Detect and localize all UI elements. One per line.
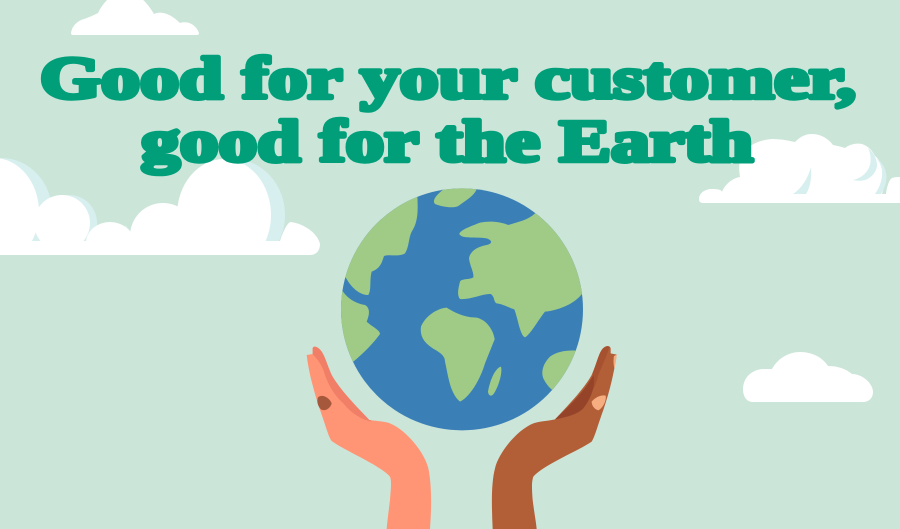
land: northern island xyxy=(434,188,476,208)
land: africa xyxy=(421,308,495,402)
land: madagascar xyxy=(488,367,501,396)
left hand xyxy=(307,345,431,529)
land: eurasia xyxy=(458,213,582,338)
title line 1: Good for your customer, xyxy=(40,45,856,111)
title xyxy=(40,45,856,174)
land: north-west continent xyxy=(346,196,418,295)
land: south-west continent xyxy=(341,291,380,362)
cloud: lower right xyxy=(743,352,873,402)
cloud: upper right xyxy=(699,134,900,203)
cloud: large left xyxy=(0,158,320,255)
cloud: top left xyxy=(71,0,199,35)
land: australia xyxy=(542,350,576,390)
title line 2: good for the Earth xyxy=(141,108,753,174)
globe xyxy=(341,188,583,430)
right hand xyxy=(492,346,617,529)
